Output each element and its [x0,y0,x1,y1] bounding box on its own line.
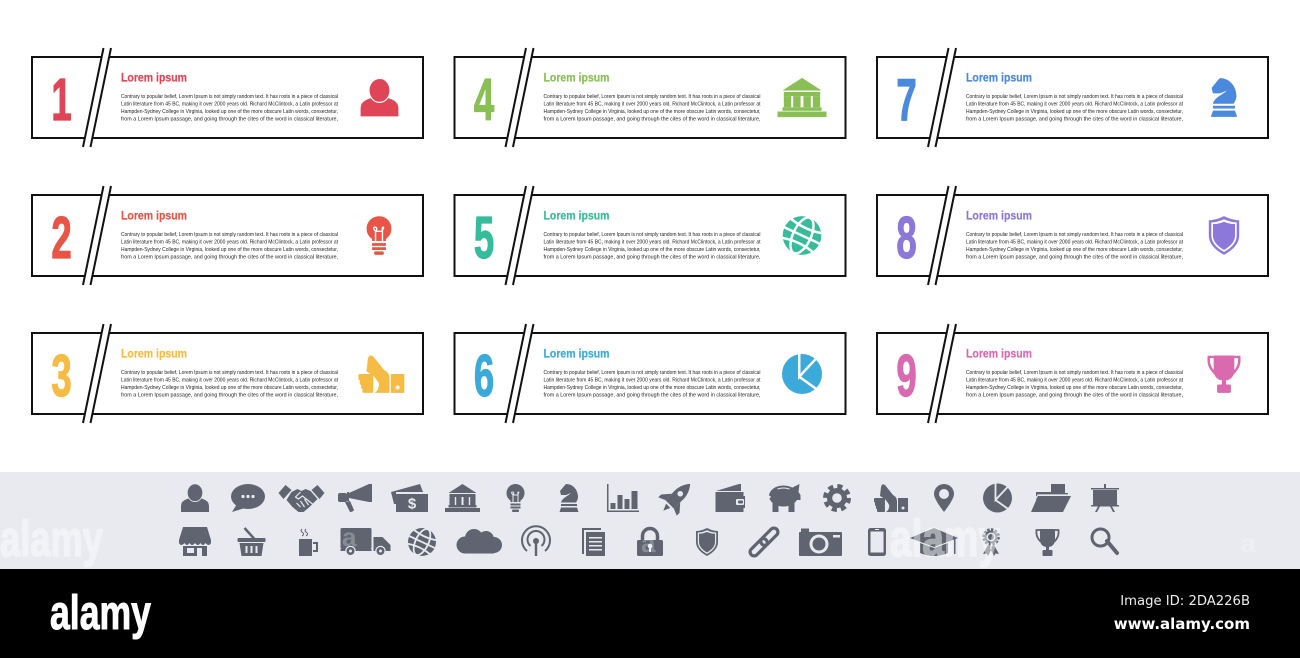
number 3: 3 [51,344,72,409]
icon: piggy bank [768,484,800,512]
text block 3: Latin literature from 45 BC, making it over 2000 years old. Richard McClintock, a Latin professor at [121,378,338,384]
icon: person [181,484,209,512]
panel: card 8 [877,186,1268,285]
icon: bank [445,484,480,512]
text block 7 [966,94,1183,122]
text block 9: Latin literature from 45 BC, making it over 2000 years old. Richard McClintock, a Latin professor at [966,378,1183,384]
text block 1 [121,94,338,122]
text block 3 [121,370,338,398]
panel: card 9 [877,324,1268,423]
text block 6 [544,370,761,398]
icon: storefront [179,527,211,556]
icon: coffee mug [299,529,318,556]
text block 1: Hampden-Sydney College in Virginia, looked up one of the more obscure Latin words, consectetur, [121,109,338,115]
text block 7: Contrary to popular belief, Lorem Ipsum is not simply random text. It has roots in a piece of classical [966,94,1183,100]
text block 5: Hampden-Sydney College in Virginia, looked up one of the more obscure Latin words, consectetur, [544,247,761,253]
number 9: 9 [896,344,917,409]
icon: speech bubble [231,484,265,512]
text block 5: Latin literature from 45 BC, making it over 2000 years old. Richard McClintock, a Latin professor at [544,240,761,246]
icon: trophy [1036,529,1059,556]
text block 8: from a Lorem Ipsum passage, and going through the cites of the word in classical literature, [966,254,1183,260]
icon: megaphone [338,484,372,512]
text block 4 [544,94,761,122]
text block 3: from a Lorem Ipsum passage, and going through the cites of the word in classical literature, [121,392,338,398]
panel: card 5 [454,186,846,285]
number 2: 2 [51,206,72,271]
icon: light bulb [506,484,524,512]
icon: bar chart [607,484,639,512]
text block 6: Hampden-Sydney College in Virginia, looked up one of the more obscure Latin words, consectetur, [544,385,761,391]
heading 9: Lorem ipsum [966,346,1032,360]
icon: cloud [456,529,502,554]
text block 8: Hampden-Sydney College in Virginia, looked up one of the more obscure Latin words, consectetur, [966,247,1183,253]
text block 7: Hampden-Sydney College in Virginia, looked up one of the more obscure Latin words, consectetur, [966,109,1183,115]
icon: camera [799,528,842,556]
icon: broadcast [522,526,550,556]
heading 2: Lorem ipsum [121,208,187,222]
watermark: truck fragment: a [342,522,357,552]
text block 4: Hampden-Sydney College in Virginia, looked up one of the more obscure Latin words, consectetur, [544,109,761,115]
icon: delivery truck [340,528,390,556]
icon: wallet [716,484,745,512]
watermark: left: alamy [0,511,103,567]
number 1: 1 [51,68,72,133]
panel: card 7 [877,48,1268,147]
text block 2: from a Lorem Ipsum passage, and going through the cites of the word in classical literature, [121,254,338,260]
icon: bank [778,78,826,117]
text block 2: Contrary to popular belief, Lorem Ipsum is not simply random text. It has roots in a piece of classical [121,232,338,238]
icon: padlock [637,528,663,556]
heading 4: Lorem ipsum [544,70,610,84]
text block 7: from a Lorem Ipsum passage, and going through the cites of the word in classical literature, [966,116,1183,122]
number 8: 8 [896,206,917,271]
heading 6: Lorem ipsum [544,346,610,360]
heading 7: Lorem ipsum [966,70,1032,84]
icon: pie chart [983,483,1012,512]
icon: gear [826,486,848,510]
watermark: padlock fragment: a [641,528,656,558]
text block 8 [966,232,1183,260]
icon: map pin [934,484,954,512]
panel: card 2 [32,186,423,285]
heading 1: Lorem ipsum [121,70,187,84]
text block 5: from a Lorem Ipsum passage, and going through the cites of the word in classical literature, [544,254,761,260]
icon: shield [696,528,718,556]
icon: trophy [1209,356,1239,393]
footer logo: alamy [50,587,151,640]
icon: light bulb [367,216,391,255]
image id: Image ID: 2DA226B [1120,594,1250,609]
text block 9: Contrary to popular belief, Lorem Ipsum is not simply random text. It has roots in a piece of classical [966,370,1183,376]
number 6: 6 [474,344,494,409]
website: www.alamy.com [1114,615,1250,633]
text block 2: Latin literature from 45 BC, making it over 2000 years old. Richard McClintock, a Latin professor at [121,240,338,246]
watermark: centre: alamy [890,510,1000,568]
icon: pie chart [782,353,822,394]
text block 6: from a Lorem Ipsum passage, and going through the cites of the word in classical literature, [544,392,761,398]
footer bar [0,569,1300,658]
icon: document [582,528,605,556]
text block 1: Contrary to popular belief, Lorem Ipsum is not simply random text. It has roots in a piece of classical [121,94,338,100]
icon: thumbs up [358,356,404,393]
icon: chain link [748,526,780,558]
text block 4: Contrary to popular belief, Lorem Ipsum is not simply random text. It has roots in a piece of classical [544,94,760,100]
text block 3: Contrary to popular belief, Lorem Ipsum is not simply random text. It has roots in a piece of classical [121,370,338,376]
text block 9 [966,370,1183,398]
panel: icon library [0,472,1300,569]
heading 5: Lorem ipsum [544,208,610,222]
icon: globe [776,210,828,261]
text block 1: Latin literature from 45 BC, making it over 2000 years old. Richard McClintock, a Latin professor at [121,102,338,108]
text block 5 [544,232,761,260]
icon: thumbs up [874,484,908,512]
icon: banknotes [391,484,428,512]
text block 4: Latin literature from 45 BC, making it over 2000 years old. Richard McClintock, a Latin professor at [544,102,761,108]
text block 9: from a Lorem Ipsum passage, and going through the cites of the word in classical literature, [966,392,1183,398]
text block 7: Latin literature from 45 BC, making it over 2000 years old. Richard McClintock, a Latin professor at [966,102,1183,108]
heading 8: Lorem ipsum [966,208,1032,222]
icon: chess knight [1211,78,1237,117]
heading 3: Lorem ipsum [121,346,187,360]
panel: card 6 [454,324,846,423]
text block 3: Hampden-Sydney College in Virginia, looked up one of the more obscure Latin words, consectetur, [121,385,338,391]
panel: card 3 [32,324,423,423]
icon: person [361,78,398,116]
text block 8: Latin literature from 45 BC, making it over 2000 years old. Richard McClintock, a Latin professor at [966,240,1183,246]
icon: magnifying glass [1092,529,1117,553]
number 5: 5 [474,206,494,271]
text block 9: Hampden-Sydney College in Virginia, looked up one of the more obscure Latin words, consectetur, [966,385,1183,391]
number 7: 7 [896,68,917,133]
icon: handshake [278,485,324,512]
icon: globe [403,523,441,561]
text block 2: Hampden-Sydney College in Virginia, looked up one of the more obscure Latin words, consectetur, [121,247,338,253]
panel: card 4 [454,48,846,147]
icon: graduation cap [910,528,958,556]
icon: basket [238,528,266,556]
icon: chess knight [560,484,578,512]
watermark: right: a [1241,528,1256,558]
text block 8: Contrary to popular belief, Lorem Ipsum is not simply random text. It has roots in a piece of classical [966,232,1183,238]
text block 4: from a Lorem Ipsum passage, and going through the cites of the word in classical literature, [544,116,761,122]
text block 5: Contrary to popular belief, Lorem Ipsum is not simply random text. It has roots in a piece of classical [544,232,760,238]
icon: award ribbon [983,530,999,556]
icon: smartphone [868,528,886,556]
text block 2 [121,232,338,260]
text block 1: from a Lorem Ipsum passage, and going through the cites of the word in classical literature, [121,116,338,122]
icon: folder [1031,484,1071,512]
icon: shield [1209,216,1239,255]
panel: card 1 [32,48,423,147]
number 4: 4 [474,68,495,133]
text block 6: Contrary to popular belief, Lorem Ipsum is not simply random text. It has roots in a piece of classical [544,370,760,376]
icon: presentation easel [1091,484,1119,512]
text block 6: Latin literature from 45 BC, making it over 2000 years old. Richard McClintock, a Latin professor at [544,378,761,384]
icon: rocket [654,475,699,520]
